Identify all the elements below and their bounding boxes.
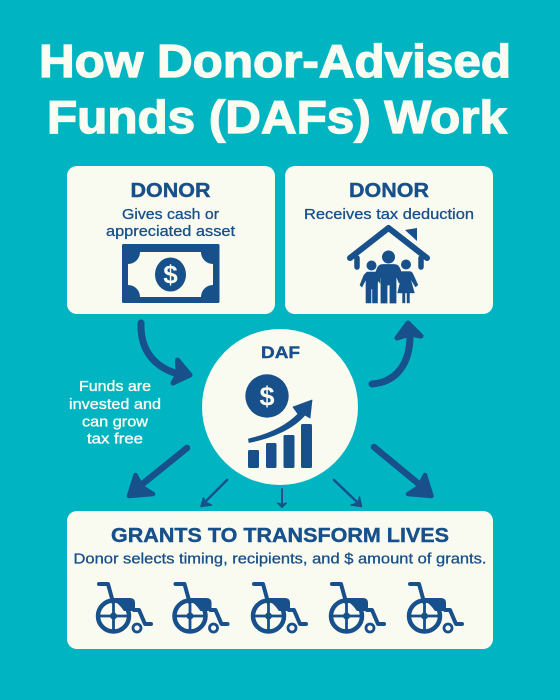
text: tax deduction: Receives tax deduction	[304, 206, 474, 223]
icon: wheelchair 4	[331, 584, 384, 632]
text: funds invested: Funds are	[79, 378, 151, 395]
arrow: small right	[334, 480, 362, 506]
icon: family under house	[350, 228, 427, 303]
heading: donor receives: DONOR	[349, 180, 430, 202]
text: grants detail: Donor selects timing, recipients, and $ amount of grants.	[74, 550, 486, 568]
text: funds invested: tax free	[87, 430, 143, 448]
heading: grants: GRANTS TO TRANSFORM LIVES	[111, 525, 449, 547]
panel: donor receives	[285, 166, 493, 314]
icon: wheelchair 2	[174, 584, 228, 632]
icon: dollar coin	[245, 374, 289, 418]
icon: dollar coin: $	[259, 382, 275, 412]
arrow: donor to DAF	[141, 323, 190, 383]
icon: wheelchair 5	[409, 584, 462, 632]
heading: DAF: DAF	[261, 343, 300, 362]
heading: donor gives: DONOR	[130, 180, 211, 202]
text: gives cash: appreciated asset	[106, 223, 236, 240]
arrow: large right	[374, 447, 432, 496]
arrow: large left	[129, 448, 187, 496]
title	[39, 35, 511, 143]
icon: banknote: $	[163, 260, 178, 290]
icon: wheelchair 1	[98, 584, 151, 632]
title: Funds (DAFs) Work	[47, 91, 507, 143]
text: funds invested	[69, 378, 161, 448]
text: gives cash: Gives cash or	[122, 206, 219, 223]
arrow: small left	[201, 480, 227, 506]
panel: grants	[67, 511, 493, 649]
text: funds invested: invested and	[69, 396, 161, 413]
icon: banknote	[122, 244, 220, 303]
text: gives cash	[106, 206, 236, 240]
title: How Donor-Advised	[39, 35, 511, 87]
arrow: DAF to donor	[372, 323, 421, 384]
panel: DAF circle	[202, 329, 358, 485]
icon: growth chart	[248, 400, 312, 468]
icon: wheelchair 3	[253, 584, 306, 632]
text: funds invested: can grow	[82, 414, 148, 430]
panel: donor gives	[67, 166, 275, 314]
arrow: small center	[278, 489, 286, 508]
